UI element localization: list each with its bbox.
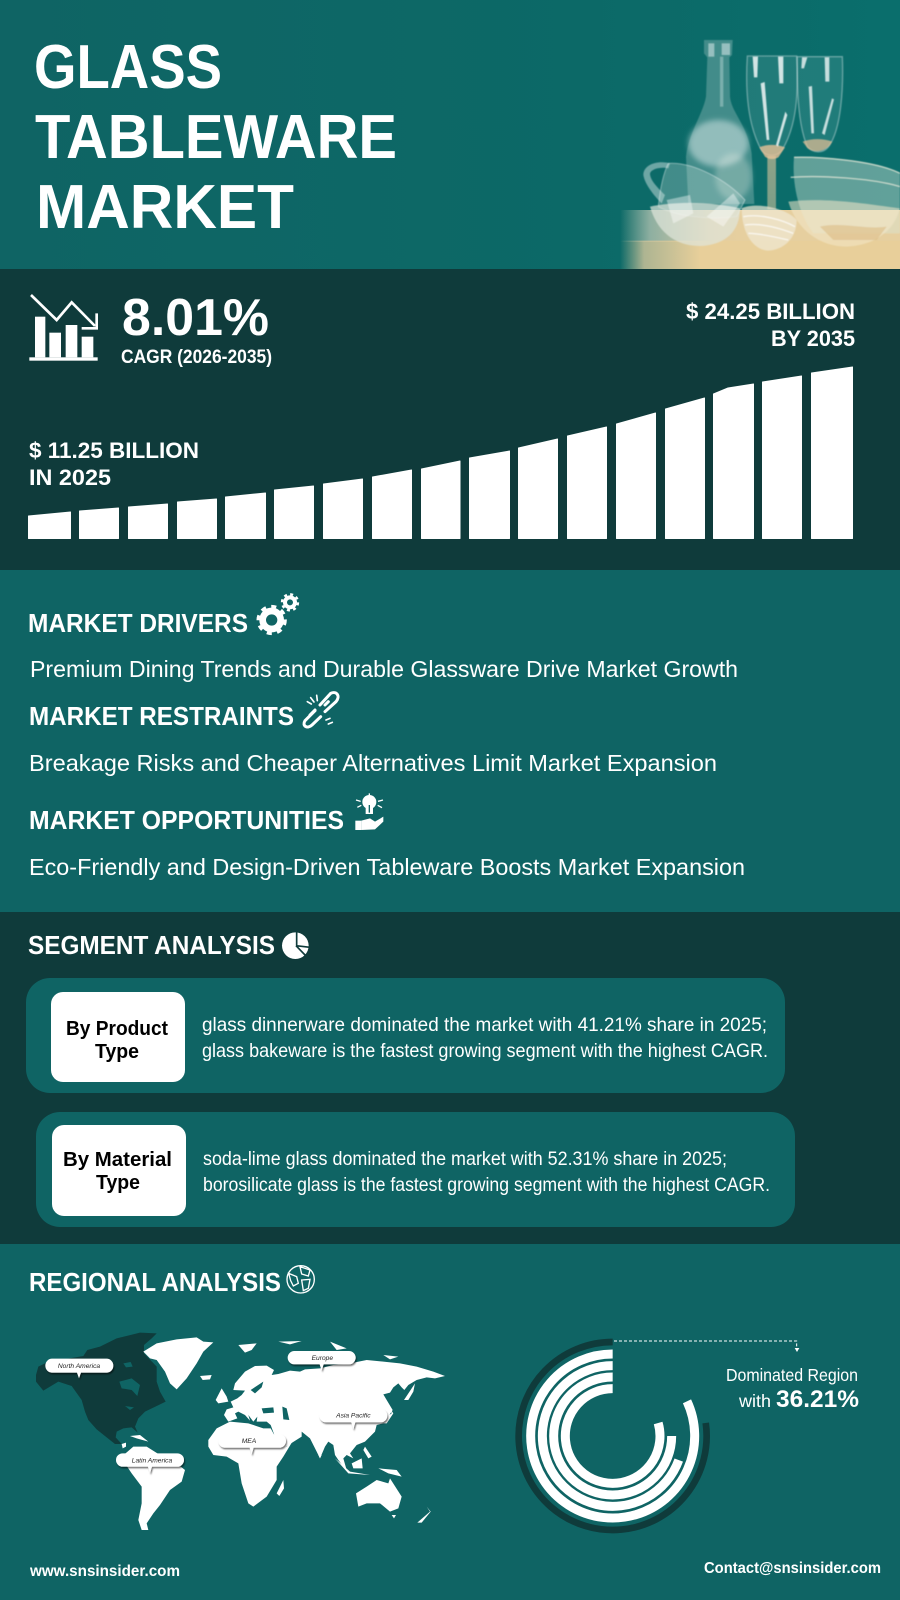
- label: europe: [288, 1351, 356, 1371]
- label: latin america: [116, 1453, 184, 1473]
- label: latin america: Latin America: [132, 1458, 173, 1465]
- panel: segment analysis: [0, 912, 900, 1244]
- CAGR value: 8.01%: [122, 289, 269, 347]
- radial chart: [519, 1342, 707, 1530]
- panel: by material type: Type: [96, 1171, 140, 1194]
- title: TABLEWARE: [35, 103, 397, 172]
- panel: by product type: glass dinnerware dominated the market with 41.21% share in 2025;: [202, 1014, 767, 1036]
- label: asia pacific: Asia Pacific: [335, 1413, 371, 1420]
- heading: market opportunities: MARKET OPPORTUNITIES: [29, 805, 344, 835]
- label: asia pacific: [319, 1409, 387, 1429]
- panel: by product type: Type: [95, 1040, 139, 1063]
- 2035 value: BY 2035: [771, 326, 855, 351]
- callout: dominated region: 36.21%: [776, 1386, 859, 1413]
- footer: website: www.snsinsider.com: [29, 1563, 180, 1580]
- region: north america: [36, 1333, 166, 1444]
- icon: pie chart: [282, 931, 310, 959]
- heading: market restraints: MARKET RESTRAINTS: [29, 701, 294, 731]
- panel: drivers, restraints, opportunities: [0, 570, 900, 912]
- label: mea: [218, 1434, 286, 1455]
- panel: by material type: By Material: [63, 1148, 172, 1171]
- icon: chart: [29, 295, 98, 361]
- panel: by product type: glass bakeware is the fastest growing segment with the highest CAGR.: [202, 1040, 768, 1062]
- heading: market drivers: MARKET DRIVERS: [28, 608, 248, 638]
- heading: segment analysis: SEGMENT ANALYSIS: [28, 930, 275, 960]
- callout: dominated region: with: [738, 1391, 771, 1411]
- image: glassware on table: [620, 40, 900, 269]
- title: MARKET: [36, 173, 294, 242]
- panel: by material type: soda-lime glass dominated the market with 52.31% share in 2025;: [203, 1148, 727, 1170]
- panel: by product type: By Product: [66, 1017, 168, 1040]
- dashed leader arrow: [614, 1341, 799, 1352]
- callout: dominated region: [726, 1365, 859, 1413]
- world map: [36, 1333, 445, 1530]
- callout: dominated region: Dominated Region: [726, 1365, 858, 1385]
- 2035 value: $ 24.25 BILLION: [686, 299, 855, 324]
- icon: globe: [287, 1266, 314, 1293]
- icon: broken chain: [304, 693, 338, 727]
- label: europe: Europe: [312, 1355, 333, 1362]
- 2035 value: [686, 299, 855, 351]
- icon: gears: [258, 594, 298, 633]
- label: north america: [45, 1359, 113, 1378]
- 2025 value: [29, 438, 199, 490]
- land: rest of world: [122, 1337, 445, 1530]
- 2025 value: IN 2025: [29, 465, 111, 490]
- heading: regional analysis: REGIONAL ANALYSIS: [29, 1267, 281, 1297]
- panel: by product type: [26, 978, 785, 1093]
- panel: header: [0, 0, 900, 270]
- CAGR label: CAGR (2026-2035): [121, 347, 272, 368]
- label: north america: North America: [58, 1363, 100, 1370]
- 2025 value: $ 11.25 BILLION: [29, 438, 199, 463]
- text: restraints: Breakage Risks and Cheaper Alternatives Limit Market Expansion: [29, 750, 717, 776]
- bar chart: [28, 367, 852, 538]
- icon: idea hand: [355, 793, 383, 830]
- panel: regional analysis: [0, 1244, 900, 1600]
- text: opportunities: Eco-Friendly and Design-Driven Tableware Boosts Market Expansion: [29, 854, 745, 880]
- title: GLASS: [34, 33, 222, 102]
- label: mea: MEA: [242, 1438, 257, 1445]
- panel: market size: [0, 269, 900, 570]
- text: drivers: Premium Dining Trends and Durable Glassware Drive Market Growth: [30, 656, 738, 682]
- title: [34, 33, 397, 242]
- footer: contact: Contact@snsinsider.com: [704, 1560, 881, 1577]
- panel: by material type: [36, 1112, 795, 1227]
- panel: by material type: borosilicate glass is the fastest growing segment with the highest CAGR.: [203, 1174, 770, 1196]
